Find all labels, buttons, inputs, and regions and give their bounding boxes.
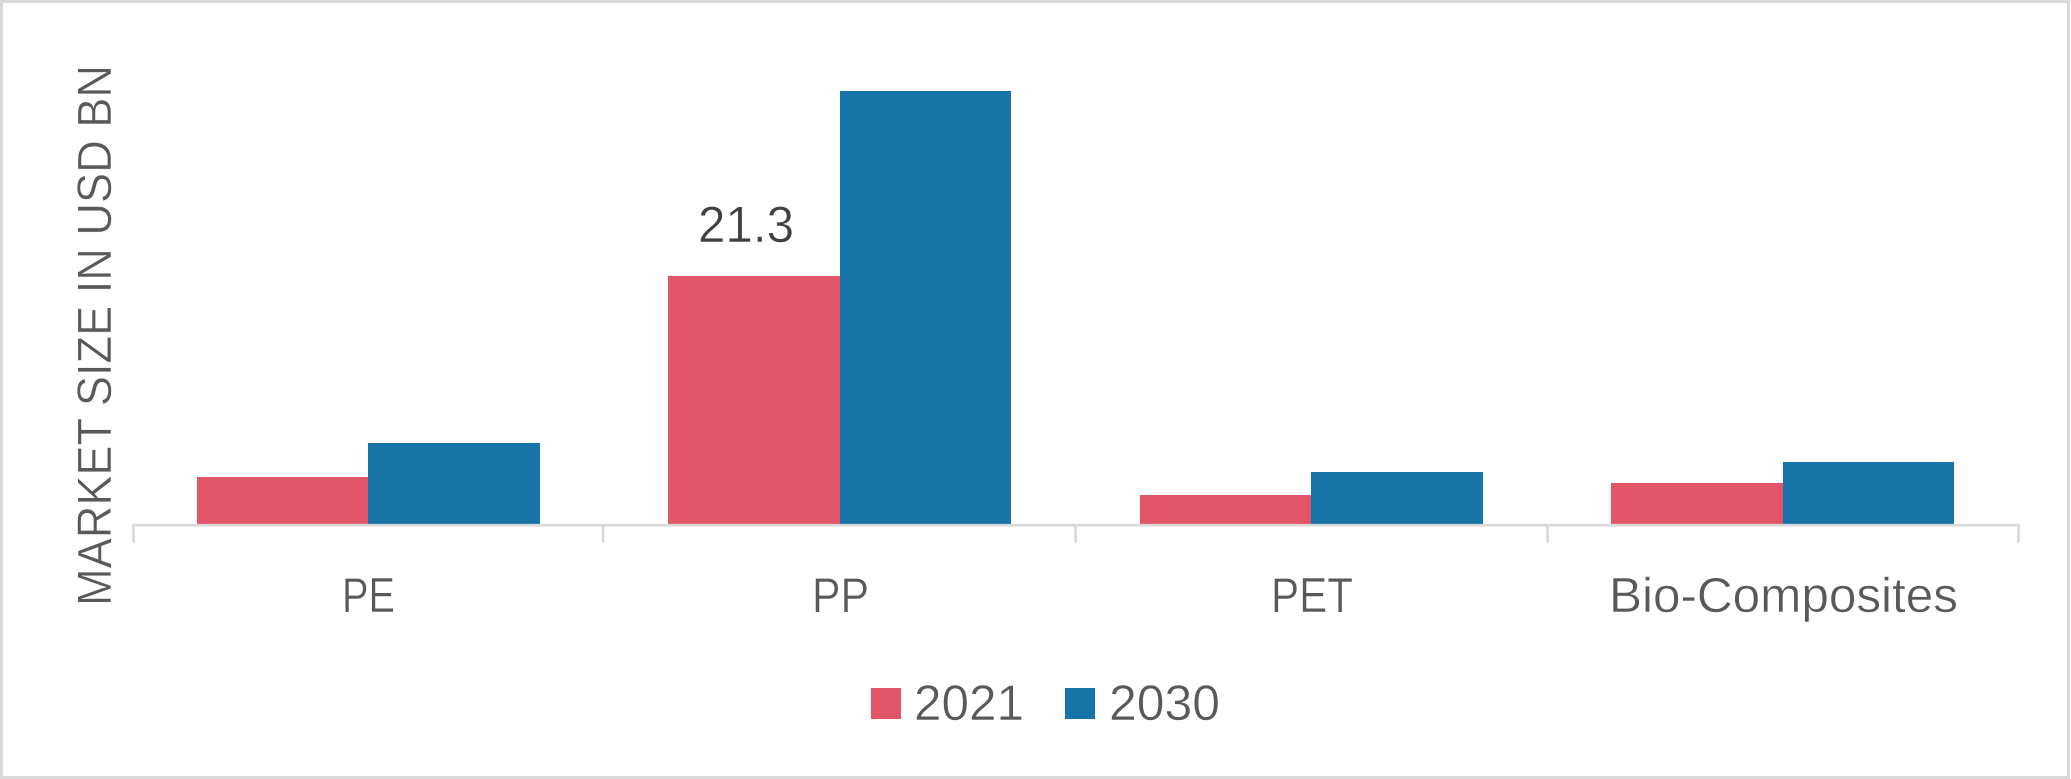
bar group: PET xyxy=(1140,472,1483,524)
category labels: PET xyxy=(1271,569,1353,623)
y axis title: MARKET SIZE IN USD BN xyxy=(69,65,122,606)
category labels xyxy=(342,569,1958,623)
legend item: 2021: 2021 xyxy=(914,675,1024,731)
legend item: 2030: 2030 xyxy=(1109,675,1220,731)
bar group: PE xyxy=(197,443,540,524)
bar group: Bio-Composites xyxy=(1611,462,1954,524)
category labels: PE xyxy=(342,569,395,623)
category labels: PP xyxy=(812,569,869,623)
bar group: PP xyxy=(668,91,1011,524)
data label: 21.3: 21.3 xyxy=(698,196,794,253)
x axis xyxy=(134,525,2018,543)
legend xyxy=(871,675,1220,731)
category labels: Bio-Composites xyxy=(1609,569,1958,623)
